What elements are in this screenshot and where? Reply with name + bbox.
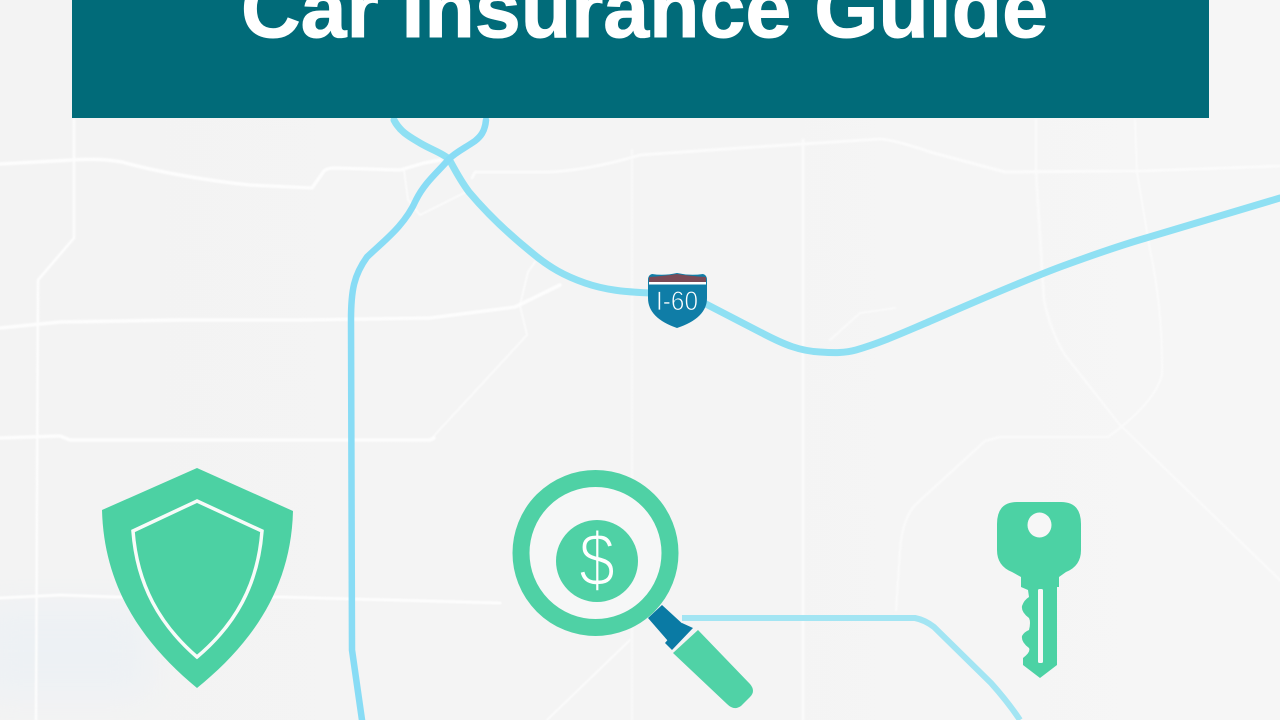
lens ring bbox=[521, 478, 670, 628]
icon: magnifying glass with dollar coin bbox=[521, 478, 753, 708]
bottom route leading to key bbox=[682, 618, 1020, 720]
dollar coin bbox=[556, 520, 638, 602]
sign number: I-60 bbox=[656, 286, 698, 316]
minor road network: west side bbox=[0, 120, 630, 720]
icon: interstate shield sign bbox=[648, 273, 707, 328]
handle grip bbox=[673, 630, 753, 708]
icon: car key bbox=[997, 502, 1081, 678]
header banner bbox=[72, 0, 1209, 118]
dollar sign: $ bbox=[579, 517, 615, 602]
highway route: main interstate bbox=[351, 120, 1280, 720]
handle collar bbox=[665, 623, 693, 650]
icon: shield bbox=[102, 468, 293, 688]
minor road network: east side bbox=[472, 120, 1280, 720]
handle neck bbox=[648, 605, 686, 641]
